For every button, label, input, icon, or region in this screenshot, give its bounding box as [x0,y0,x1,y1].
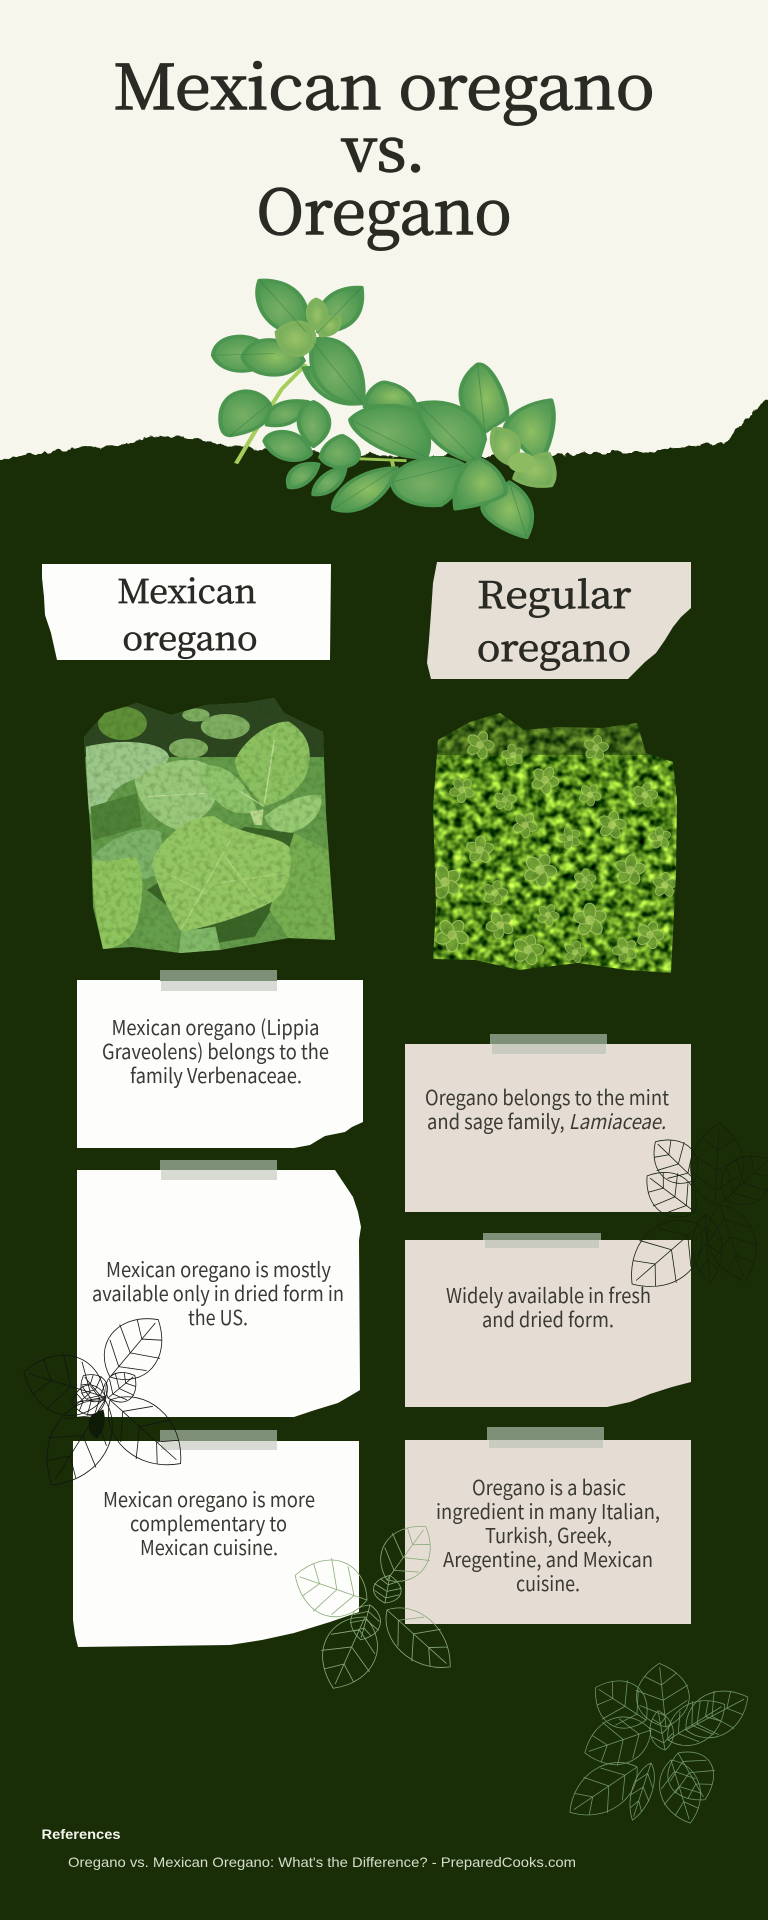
card: dried form [77,1160,361,1417]
reference citation: Oregano vs. Mexican Oregano: What's the Difference? - PreparedCooks.com [68,1854,576,1870]
card: cuisine: Mexican cuisine. [140,1531,278,1561]
card: Lamiaceae [405,1034,691,1212]
card: dried form: available only in dried form in [92,1277,344,1307]
tape [487,1427,604,1448]
card: Verbenaceae: family Verbenaceae. [130,1059,302,1089]
card: Lamiaceae: and sage family, Lamiaceae. [427,1105,666,1135]
label: Mexican oregano: oregano [122,613,258,660]
tape [160,1430,277,1450]
tape [490,1034,607,1054]
card: Lamiaceae: Oregano belongs to the mint [425,1081,669,1111]
sketch: pale green leaves centre [286,1513,465,1699]
references heading: References [42,1827,120,1842]
card: fresh and dried: and dried form. [482,1303,614,1333]
card: cuisine: complementary to [130,1507,287,1537]
card: fresh and dried [405,1233,691,1407]
label: Regular oregano: Regular [477,565,631,619]
card: Verbenaceae [77,970,363,1148]
card: basic ingredient: Turkish, Greek, [485,1519,612,1549]
torn cream header panel [0,0,768,462]
title: Mexican oregano [114,38,654,127]
title [114,38,654,252]
card: basic ingredient: Oregano is a basic [472,1471,626,1501]
tape [483,1233,601,1248]
label: Regular oregano [427,562,691,679]
photo: regular oregano shrub [421,710,680,976]
card: dried form: the US. [188,1301,248,1331]
card: cuisine: Mexican oregano is more [103,1483,315,1513]
sketch: black leaves right [614,1122,768,1305]
illustration: oregano sprig [213,280,554,537]
card: basic ingredient: cuisine. [516,1567,580,1597]
card: Verbenaceae: Graveolens) belongs to the [102,1035,329,1065]
label: Mexican oregano [42,564,331,660]
photo: Mexican oregano leaves [80,695,340,955]
card: fresh and dried: Widely available in fresh [446,1279,651,1309]
card: basic ingredient: Aregentine, and Mexican [443,1543,653,1573]
tape [160,970,277,991]
title: Oregano [256,163,512,252]
label: Mexican oregano: Mexican [118,566,256,613]
tape [160,1160,277,1180]
sketch: green leaves bottom right [558,1661,758,1830]
sketch: black leaves left [15,1303,198,1500]
title: vs. [341,100,426,189]
card: basic ingredient: ingredient in many Italian, [436,1495,660,1525]
card: Verbenaceae: Mexican oregano (Lippia [112,1011,320,1041]
card: basic ingredient [405,1427,691,1624]
label: Regular oregano: oregano [477,618,631,672]
card: cuisine [73,1430,359,1647]
card: dried form: Mexican oregano is mostly [106,1253,331,1283]
